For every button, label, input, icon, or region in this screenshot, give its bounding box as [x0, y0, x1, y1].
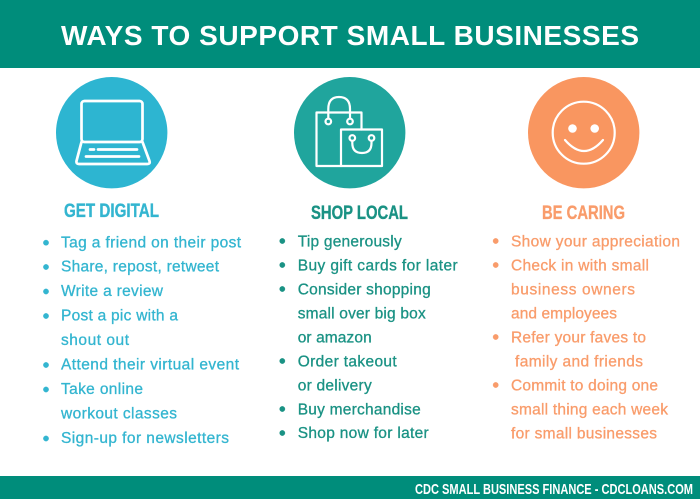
list: get digital: Write a review — [61, 283, 164, 300]
list: shop local — [280, 234, 458, 442]
list: get digital — [43, 234, 242, 447]
footer banner — [0, 476, 700, 499]
list: be caring: and employees — [511, 306, 617, 322]
panel: be caring — [493, 77, 680, 442]
list: be caring — [493, 234, 680, 442]
icon: smiley face — [528, 77, 639, 188]
list: get digital: Tag a friend on their post — [61, 234, 242, 251]
list: get digital: workout classes — [60, 406, 177, 422]
list: be caring: Show your appreciation — [511, 234, 680, 250]
heading: get digital: GET DIGITAL — [64, 201, 159, 222]
list: shop local: Tip generously — [298, 234, 402, 250]
list: get digital: Sign-up for newsletters — [61, 430, 229, 447]
list: be caring: small thing each week — [511, 402, 668, 418]
panel: shop local — [280, 77, 458, 442]
list: shop local: Order takeout — [298, 354, 397, 370]
list: be caring: business owners — [511, 282, 635, 298]
title: WAYS TO SUPPORT SMALL BUSINESSES — [61, 20, 639, 51]
list: shop local: or amazon — [298, 330, 372, 346]
list: shop local: Buy merchandise — [298, 402, 421, 418]
list: get digital: Share, repost, retweet — [61, 259, 220, 276]
list: be caring: family and friends — [515, 354, 643, 370]
list: get digital: Attend their virtual event — [61, 356, 240, 374]
list: shop local: Shop now for later — [298, 425, 429, 442]
list: be caring: Refer your faves to — [511, 330, 646, 346]
icon: laptop — [56, 77, 167, 188]
list: be caring: for small businesses — [511, 426, 657, 442]
panel: get digital — [43, 77, 242, 447]
list: shop local: or delivery — [298, 378, 372, 394]
list: be caring: Commit to doing one — [511, 378, 658, 394]
heading: be caring: BE CARING — [542, 203, 625, 224]
header banner — [0, 0, 700, 68]
list: get digital: Post a pic with a — [61, 308, 178, 325]
list: shop local: Buy gift cards for later — [298, 258, 458, 274]
list: shop local: Consider shopping — [298, 282, 431, 298]
list: shop local: small over big box — [298, 306, 426, 322]
icon: shopping bags — [294, 77, 405, 188]
list: get digital: shout out — [61, 332, 130, 349]
heading: shop local: SHOP LOCAL — [311, 203, 408, 224]
list: be caring: Check in with small — [511, 258, 649, 274]
list: get digital: Take online — [61, 381, 143, 398]
